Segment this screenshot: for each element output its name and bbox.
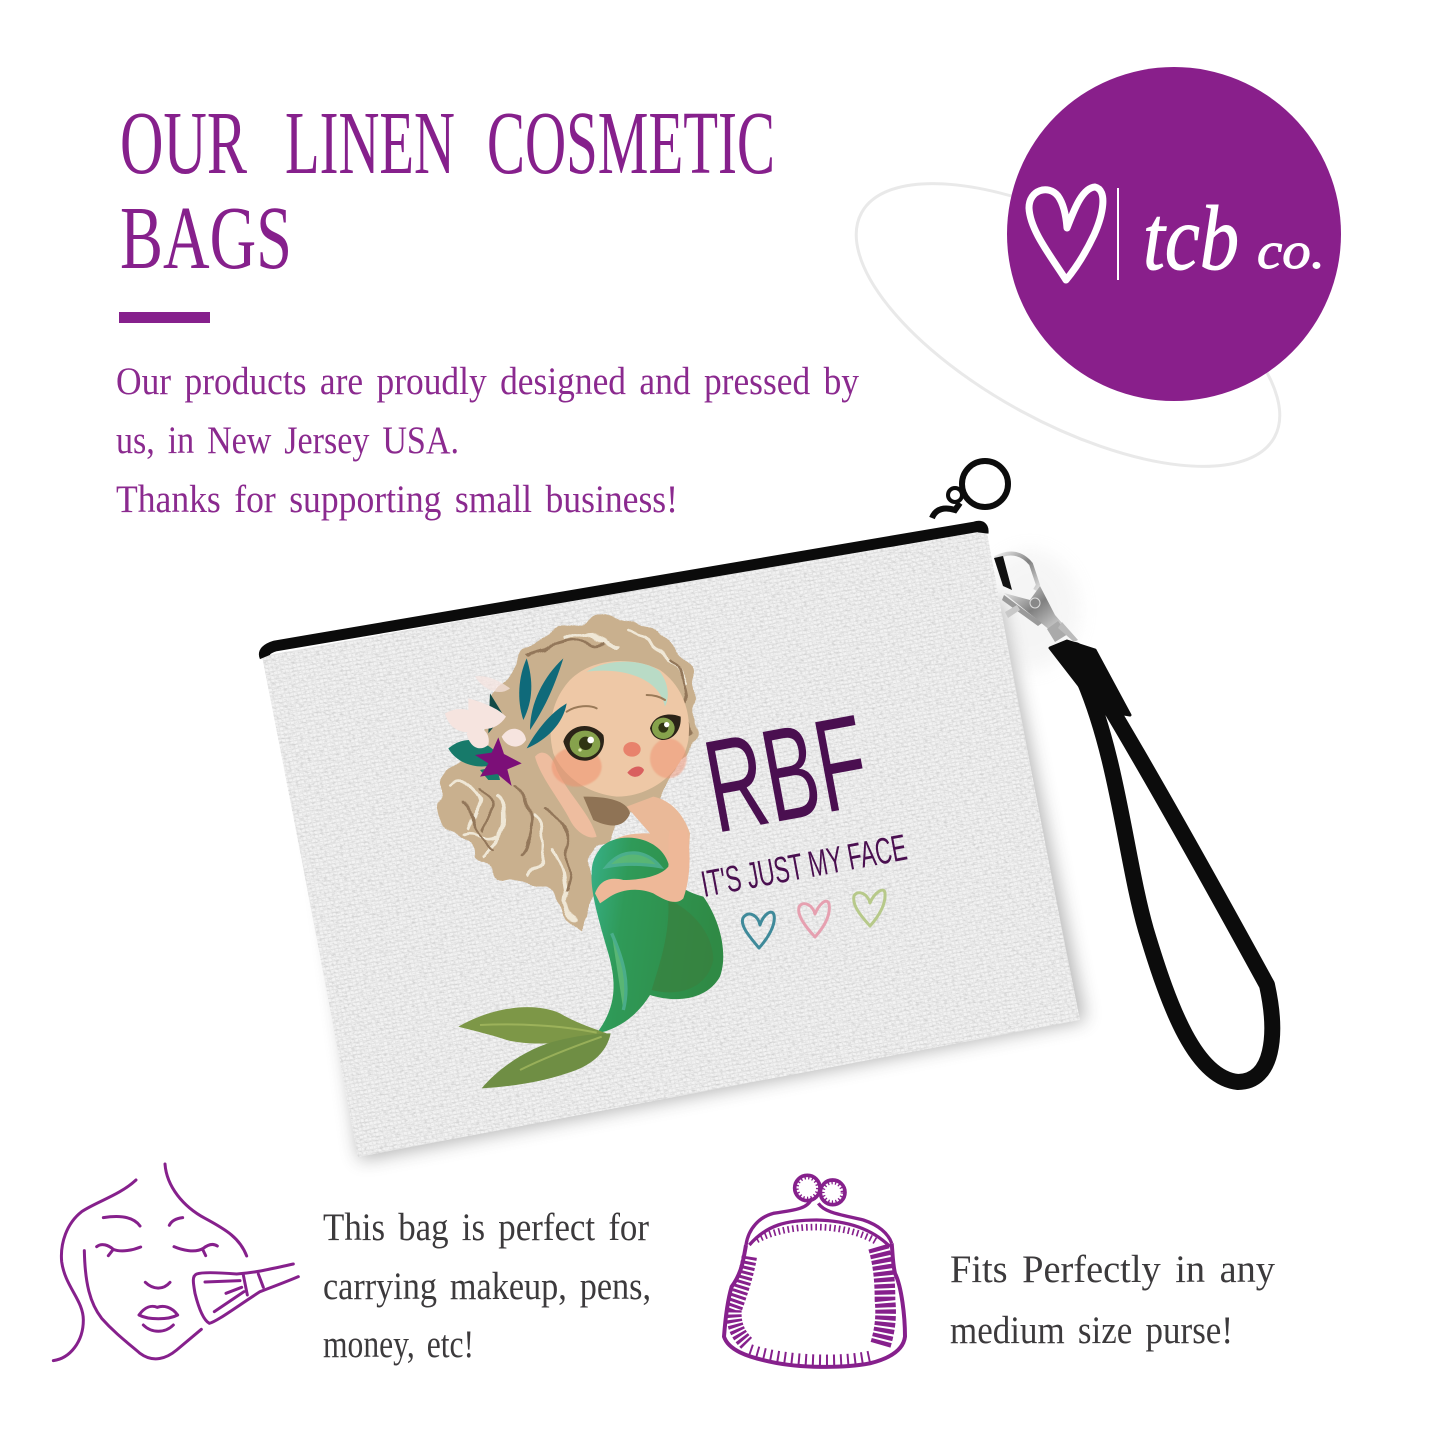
title: OUR [120, 94, 247, 193]
clip shadow [980, 550, 1080, 670]
neck and shoulder [600, 797, 690, 902]
shadow hair under chin [583, 797, 630, 825]
intro text block: Our products are proudly designed and pressed by [116, 360, 859, 403]
title: LINEN [285, 94, 455, 193]
face [551, 661, 689, 797]
zipper [264, 526, 983, 657]
feature text: makeup: This bag is perfect for [323, 1206, 649, 1249]
linen noise [262, 527, 1080, 1157]
eyebrows [567, 695, 665, 712]
metal clasp [994, 553, 1078, 642]
upper tail fin [458, 1007, 607, 1043]
torso and tail [592, 838, 723, 1033]
eye left [563, 726, 604, 761]
bag body linen [262, 527, 1080, 1157]
logo divider [1117, 188, 1119, 280]
decorative orbit ring [815, 127, 1321, 523]
hair [435, 617, 695, 930]
fin veins [480, 1024, 602, 1070]
purse hatching right [878, 1247, 886, 1347]
heading rule [119, 312, 210, 323]
zipper pull and key ring [932, 461, 1008, 518]
purse hatching bottom [750, 1350, 870, 1361]
arm across chest [595, 830, 690, 903]
title: COSMETIC [487, 94, 775, 193]
purple flower [475, 737, 522, 786]
intro text block: us, in New Jersey USA. [116, 419, 459, 462]
three outlined hearts [742, 890, 885, 948]
cheek blush [552, 738, 687, 787]
wrist strap [1050, 641, 1272, 1082]
white blossoms [445, 676, 526, 748]
purse outline [724, 1243, 905, 1367]
tail highlight [607, 853, 660, 1010]
logo wordmark: co. [1257, 223, 1325, 280]
intro text block [116, 360, 859, 521]
feature text: makeup: money, etc! [323, 1323, 474, 1366]
leaves in hair [448, 658, 567, 780]
tail shading [652, 900, 713, 992]
icon: coin purse [724, 1175, 905, 1367]
mermaid illustration [435, 617, 723, 1088]
purse hatching top [757, 1227, 877, 1242]
icon: logo heart [1029, 187, 1103, 280]
slogan subline: IT'S JUST MY FACE [698, 827, 910, 905]
eye right [650, 714, 681, 740]
title [120, 94, 775, 288]
icon: face with makeup brush [53, 1164, 298, 1361]
feature text: purse [950, 1248, 1275, 1352]
purse hatching left [734, 1257, 749, 1343]
feature text: makeup [323, 1206, 651, 1366]
feature text: purse: medium size purse! [950, 1309, 1233, 1352]
purse clasp knobs [746, 1175, 892, 1247]
slogan RBF: RBF [694, 687, 878, 861]
product: cosmetic bag [262, 461, 1272, 1160]
nose and mouth [623, 742, 644, 777]
arm to cheek [535, 753, 597, 838]
title: BAGS [120, 189, 292, 288]
logo wordmark: tcb [1143, 187, 1239, 289]
bag shadow [300, 600, 1085, 1160]
intro text block: Thanks for supporting small business! [116, 478, 678, 521]
feature text: purse: Fits Perfectly in any [950, 1248, 1275, 1291]
forehead highlight [587, 662, 668, 707]
logo badge [1007, 67, 1341, 401]
lower tail fin [482, 1033, 611, 1088]
feature text: makeup: carrying makeup, pens, [323, 1265, 651, 1308]
logo wordmark [1143, 187, 1325, 289]
